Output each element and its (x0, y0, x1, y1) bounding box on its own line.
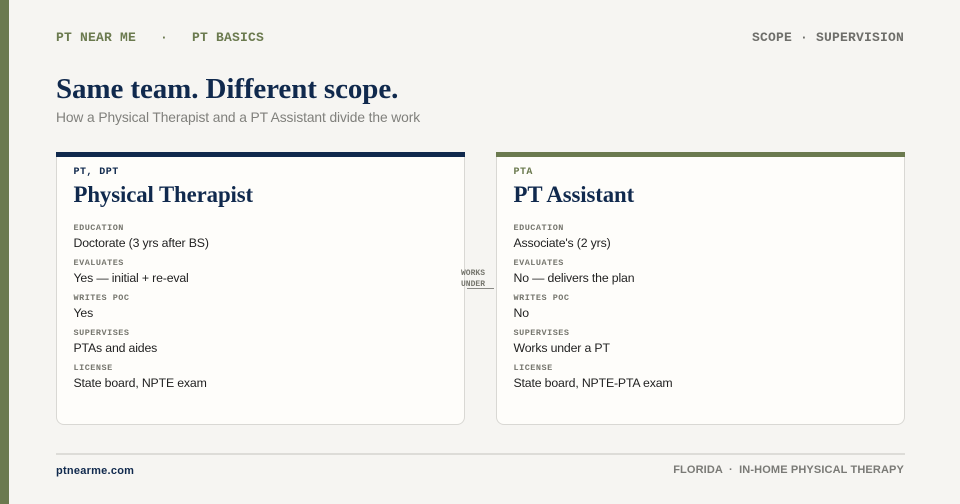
value: supervises: Works under a PT (514, 341, 610, 355)
row: license: LICENSE (74, 363, 113, 373)
row: supervises: SUPERVISES (514, 328, 570, 338)
value: supervises: PTAs and aides (74, 341, 157, 355)
row: evaluates: EVALUATES (514, 258, 564, 268)
header: breadcrumb: PT NEAR ME · PT BASICS (56, 30, 264, 45)
footer: region: FLORIDA · IN-HOME PHYSICAL THERAPY (673, 464, 904, 476)
panel: physical therapist (56, 152, 465, 425)
left accent stripe (0, 0, 9, 504)
footer: site: ptnearme.com (56, 465, 134, 477)
row: license: LICENSE (514, 363, 553, 373)
value: license: State board, NPTE exam (74, 376, 207, 390)
title: Same team. Different scope. (56, 73, 398, 105)
value: evaluates: Yes — initial + re-eval (74, 271, 189, 285)
row: evaluates: EVALUATES (74, 258, 124, 268)
connector label: works under: UNDER (461, 280, 485, 289)
value: license: State board, NPTE-PTA exam (514, 376, 672, 390)
row: supervises: SUPERVISES (74, 328, 130, 338)
connector label: works under: WORKS (461, 269, 485, 278)
value: writes poc: Yes (74, 306, 93, 320)
value: education: Doctorate (3 yrs after BS) (74, 236, 209, 250)
panel: pt assistant (496, 152, 905, 425)
row: writes poc: WRITES POC (74, 293, 130, 303)
row: education: EDUCATION (74, 223, 124, 233)
value: evaluates: No — delivers the plan (514, 271, 634, 285)
footer rule (56, 453, 905, 455)
connector line (467, 288, 494, 289)
panel: physical therapist: Physical Therapist (74, 182, 253, 207)
value: writes poc: No (514, 306, 529, 320)
value: education: Associate's (2 yrs) (514, 236, 611, 250)
panel: physical therapist: PT, DPT (74, 167, 119, 178)
header: topic tags: SCOPE · SUPERVISION (752, 30, 904, 45)
row: writes poc: WRITES POC (514, 293, 570, 303)
panel: pt assistant: PT Assistant (514, 182, 634, 207)
panel: pt assistant: PTA (514, 167, 533, 178)
connector label: works under (461, 269, 485, 289)
row: education: EDUCATION (514, 223, 564, 233)
subtitle: How a Physical Therapist and a PT Assistant divide the work (56, 110, 420, 125)
